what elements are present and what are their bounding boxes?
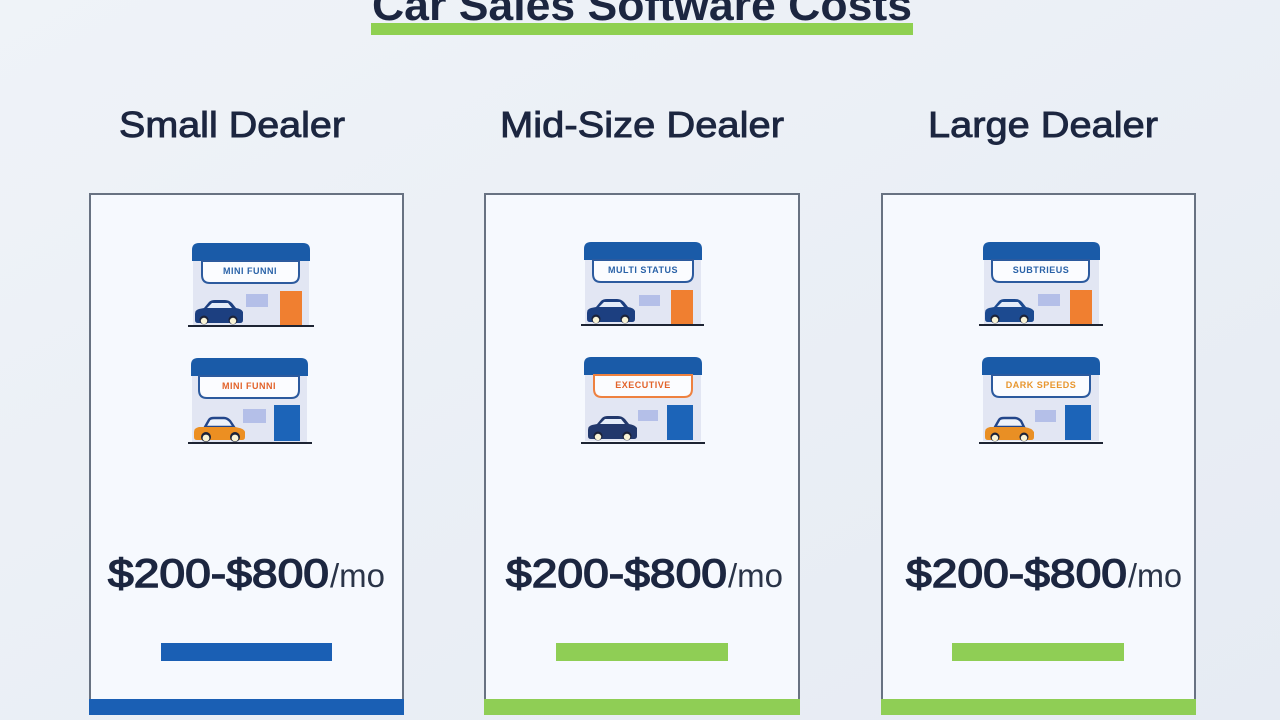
icon: dealership with orange car: DARK SPEEDS — [1006, 380, 1076, 390]
price: $200-$800 — [506, 552, 727, 596]
cost bar — [556, 643, 728, 661]
panel footer bar — [881, 699, 1196, 715]
icon: dealership with orange car: MINI FUNNI — [222, 381, 276, 391]
title underline — [371, 23, 913, 35]
price: $200-$800 — [906, 552, 1127, 596]
panel: small dealer — [89, 194, 404, 715]
icon: dealership with navy car — [581, 357, 705, 444]
icon: dealership with blue car: SUBTRIEUS — [1013, 265, 1069, 275]
price: /mo — [728, 557, 783, 594]
icon: dealership with blue car — [188, 243, 314, 327]
panel: large dealer — [881, 194, 1196, 715]
price: $200-$800 — [108, 552, 329, 596]
icon: dealership with orange car — [188, 358, 312, 444]
panel footer bar — [484, 699, 800, 715]
panel: mid-size dealer — [484, 194, 800, 715]
price: /mo — [330, 557, 385, 594]
icon: dealership with navy car: EXECUTIVE — [615, 380, 671, 390]
price: /mo — [1128, 557, 1182, 594]
cost bar — [952, 643, 1124, 661]
price — [506, 552, 783, 596]
heading: large dealer: Large Dealer — [928, 104, 1158, 145]
heading: mid-size dealer: Mid-Size Dealer — [500, 104, 784, 145]
icon: dealership with orange car — [979, 357, 1103, 444]
price — [906, 552, 1182, 596]
icon: dealership with blue car: MULTI STATUS — [608, 265, 678, 275]
icon: dealership with blue car — [581, 242, 704, 326]
panel footer bar — [89, 699, 404, 715]
icon: dealership with blue car — [979, 242, 1103, 326]
icon: dealership with blue car: MINI FUNNI — [223, 266, 277, 276]
heading: small dealer: Small Dealer — [119, 104, 345, 145]
cost bar — [161, 643, 332, 661]
price — [108, 552, 385, 596]
